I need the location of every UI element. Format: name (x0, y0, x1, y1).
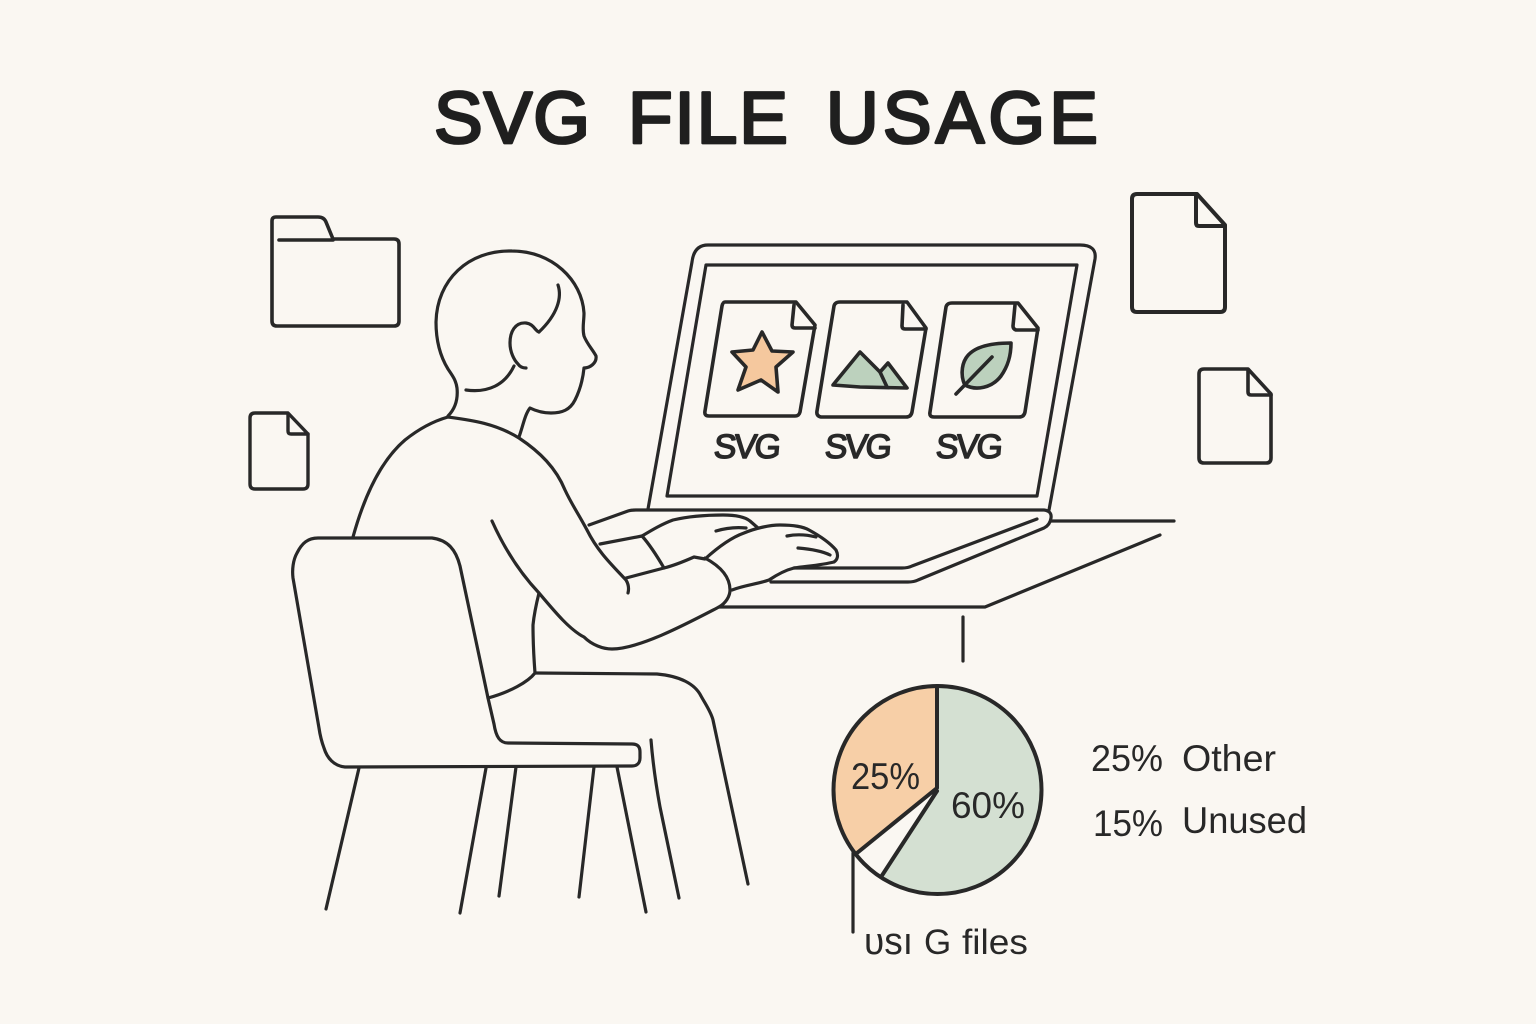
far forearm and hand (600, 515, 758, 544)
torso (488, 593, 539, 698)
caption word: files (962, 923, 1028, 962)
desk (719, 521, 1174, 661)
desk leg (961, 617, 965, 661)
screen file: mountain (817, 302, 926, 417)
title word: SVG: SVG (434, 78, 590, 159)
pie slice: 25% orange (835, 685, 937, 853)
title (434, 78, 1098, 159)
chair (293, 538, 646, 913)
near forearm and hand (626, 525, 837, 590)
legend: 15% unused: Unused (1182, 800, 1307, 841)
legend: 25% other: 25% (1091, 738, 1163, 779)
label: 60% in pie: 60% (951, 785, 1025, 826)
label: SVG two: SVG (823, 428, 894, 466)
pie caption (864, 921, 1028, 963)
title word: USAGE: USAGE (826, 78, 1098, 159)
pie dividers (857, 686, 937, 877)
icon: folder (272, 217, 399, 326)
person (353, 251, 837, 898)
title word: FILE: FILE (628, 78, 788, 159)
laptop lid (648, 245, 1095, 510)
chair legs (326, 768, 359, 909)
label: 25% in pie: 25% (851, 756, 920, 797)
laptop base (589, 510, 1051, 582)
label: SVG three: SVG (934, 428, 1005, 466)
hairline (539, 285, 559, 332)
jaw line (466, 366, 514, 391)
icon: small document right (1199, 369, 1271, 463)
pie outline (834, 686, 1042, 894)
laptop screen (667, 265, 1077, 496)
chair back and seat (293, 538, 640, 767)
icon: leaf (962, 343, 1011, 388)
pie leader line (851, 853, 855, 932)
caption letter: G (924, 923, 951, 962)
laptop keyboard edge (794, 519, 1037, 568)
legend: 25% other: Other (1182, 738, 1276, 779)
legend (1091, 738, 1307, 844)
pie slice: 60% green (881, 685, 1040, 893)
far sleeve cuff (642, 536, 664, 568)
far hand finger (716, 528, 746, 531)
icon: small document left (250, 413, 308, 489)
near hand fingers (787, 535, 816, 537)
icon: large document right (1132, 194, 1225, 312)
arm underside and sleeve (492, 521, 730, 649)
icon: mountains (833, 352, 907, 388)
thigh and outer leg (535, 673, 748, 884)
screen file: star (705, 302, 815, 416)
back and shoulder (353, 417, 629, 593)
pie chart (834, 685, 1042, 894)
screen file: leaf (930, 303, 1038, 417)
inner leg (651, 740, 679, 898)
icon: star (732, 332, 793, 392)
screen labels (712, 428, 1005, 466)
caption fragment: υsı (864, 921, 913, 963)
label: SVG one: SVG (712, 428, 783, 466)
ear (510, 323, 539, 368)
head and face (436, 251, 596, 437)
legend: 15% unused: 15% (1093, 803, 1163, 844)
laptop (589, 245, 1095, 582)
